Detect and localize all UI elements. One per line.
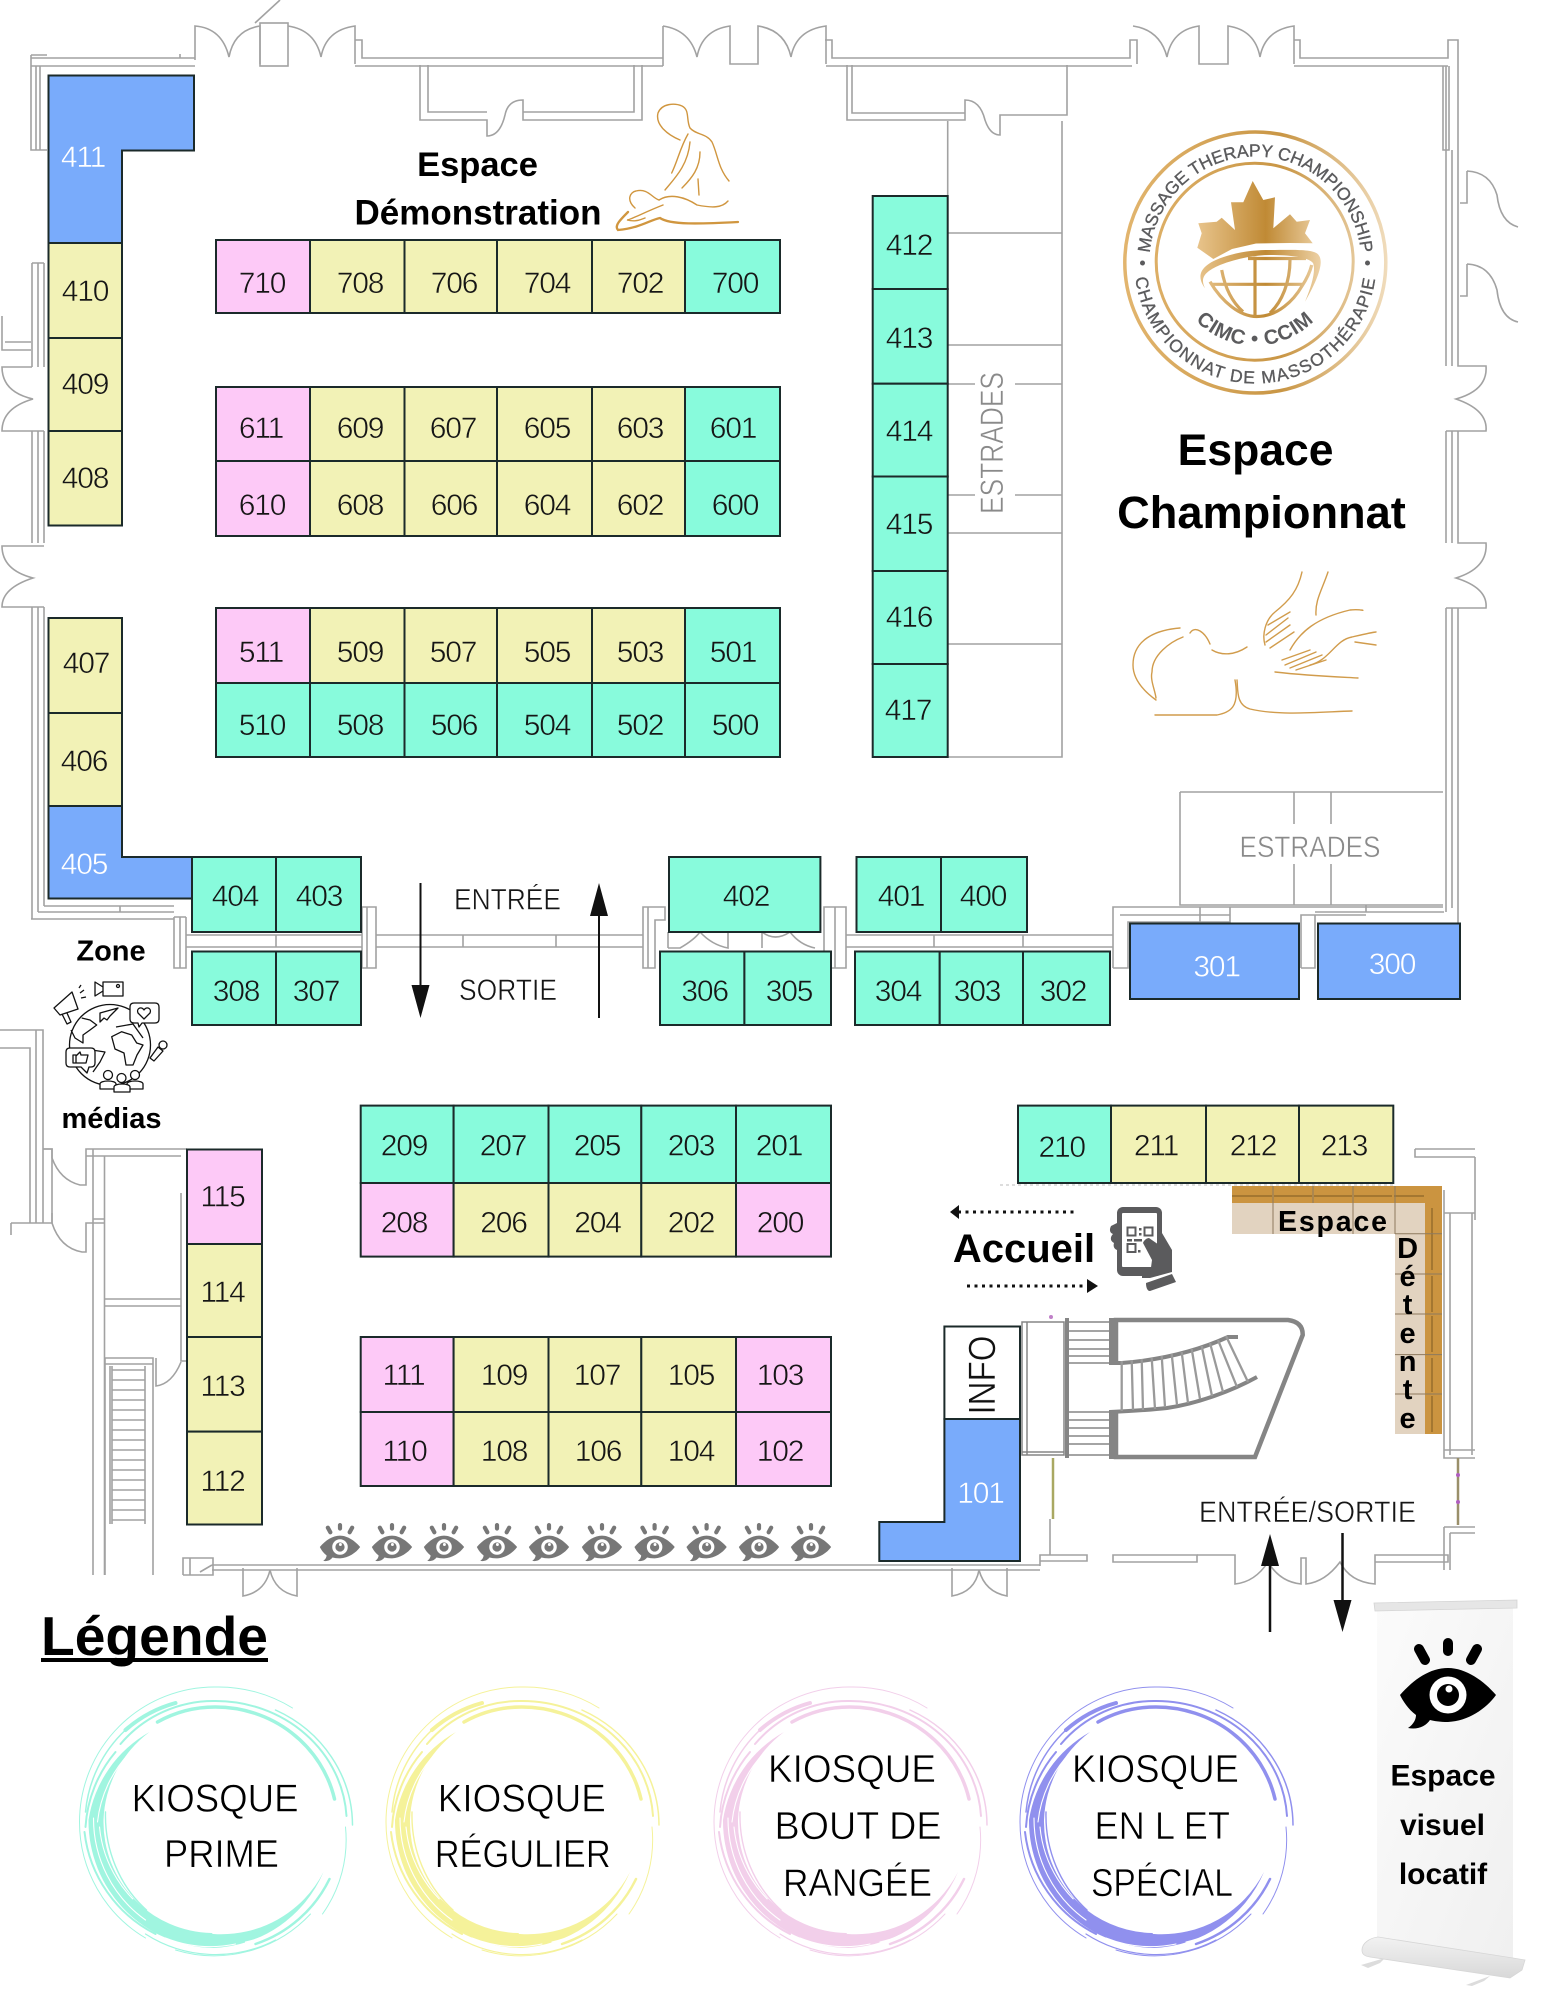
booth 212 [1206,1106,1299,1183]
booth block 200 rows [361,1106,831,1257]
heart bubble [130,1003,159,1027]
espace détente lounge: D [1397,1233,1418,1265]
booth 601: 601 [710,412,757,445]
visual rental spots row of eyes [320,1525,831,1561]
booth 710: 710 [239,267,286,300]
booth 300: 300 [1369,948,1416,981]
booth 411 [48,76,194,243]
booth block 700 row [216,240,780,313]
booth 611 [216,387,310,461]
booth 608 [310,461,404,536]
booth 503 [592,608,685,683]
roll-up banner: espace visuel locatif: visuel [1400,1809,1485,1842]
booth 208 [361,1183,454,1257]
booth 511: 511 [239,636,284,669]
heading: espace demonstration [355,146,601,232]
olive partition lines [1049,1315,1460,1525]
label: sortie: SORTIE [459,974,557,1007]
booth 213 [1299,1106,1393,1183]
booth block 500 rows [216,608,780,757]
booth 200: 200 [757,1206,804,1240]
booth 110: 110 [382,1435,427,1468]
booth 103 [736,1337,831,1412]
estrades structure right of 412-417 [948,121,1062,757]
booth 105: 105 [668,1359,715,1392]
booth 102: 102 [757,1435,804,1468]
legend: kiosque régulier [386,1687,659,1956]
booth 400 [941,857,1027,932]
booth 112: 112 [200,1465,245,1498]
eye 10 [791,1525,831,1561]
booth 504: 504 [524,709,571,742]
logo: CIMC CCIM championship seal: MASSAGE THERAPY CHAMPIONSHIP [1138,144,1372,252]
arrow: entry up [1261,1534,1279,1632]
booth 504 [497,683,592,757]
booth 405: 405 [61,848,108,881]
booth 509: 509 [337,636,384,669]
booth 203: 203 [668,1130,715,1162]
booth 507 [404,608,497,683]
eye 5 [529,1525,569,1561]
espace détente lounge: t [1403,1289,1413,1321]
booth 107: 107 [574,1359,621,1392]
booth 510: 510 [239,709,286,742]
building walls [0,0,1518,1596]
booth row 210-213 [1018,1106,1393,1183]
booth 605 [497,387,592,461]
booth 114 [187,1244,262,1337]
booth 306: 306 [681,975,728,1008]
logo: CIMC CCIM championship seal: CIMC • CCIM [1198,312,1313,344]
legend: kiosque prime [80,1687,352,1956]
booth 211 [1111,1106,1206,1183]
booth 210: 210 [1038,1131,1085,1164]
booth 407: 407 [63,647,110,680]
booth 511 [216,608,310,683]
booth column 400 left [48,76,194,898]
booth 508 [310,683,404,757]
booth 603 [592,387,685,461]
people [104,1070,112,1080]
espace détente lounge: e [1400,1318,1416,1350]
booth 412: 412 [886,229,933,262]
booth 301: 301 [1193,950,1240,984]
booth block 600 rows [216,387,780,536]
booth 702: 702 [617,267,664,300]
booth 305 [744,952,831,1025]
booth 409 [48,338,122,431]
info desk: INFO [962,1336,1004,1414]
booth 410: 410 [62,275,109,308]
booth 602: 602 [617,489,664,522]
booth 706: 706 [431,267,478,300]
booth 302 [1023,952,1110,1025]
booth 408 [48,431,122,526]
dashed reception boundary [1000,1184,1394,1186]
maple leaf [1197,181,1313,259]
booth 700: 700 [712,267,759,300]
eye 7 [634,1525,675,1561]
booth 502 [592,683,685,757]
heading: légende: Légende [41,1605,268,1667]
eye 9 [739,1525,779,1561]
booth 207 [454,1106,548,1183]
booth 407 [48,618,122,713]
booth 111: 111 [382,1359,425,1392]
icon: massage demonstration figure [617,104,738,230]
eye 6 [582,1525,622,1561]
arrow: down [412,883,430,1018]
booth 307: 307 [293,975,340,1008]
heading: espace demonstration: Espace [417,146,538,184]
legend: kiosque bout de rangée: BOUT DE [774,1805,942,1848]
logo: CIMC CCIM championship seal [1123,130,1388,395]
booth 205: 205 [574,1130,621,1162]
espace détente lounge: n [1399,1346,1416,1378]
camera [95,982,123,996]
booth 611: 611 [239,412,284,445]
booth 114: 114 [200,1276,245,1309]
legend: kiosque bout de rangée [714,1687,987,1956]
booth 708: 708 [337,267,384,300]
booth 415 [873,476,948,571]
booth column 412-417 [873,196,948,757]
booth 207: 207 [480,1130,527,1162]
booth 600 [685,461,780,536]
booth 401: 401 [878,880,925,913]
staircase [1022,1318,1303,1459]
booth 501: 501 [710,636,757,669]
microphone [150,1047,163,1061]
booth 503: 503 [617,636,664,669]
eye 1 [320,1525,360,1561]
legend: kiosque prime: KIOSQUE [132,1778,299,1821]
booth 609: 609 [337,412,384,445]
booth 106: 106 [575,1435,622,1468]
booth 417: 417 [885,694,932,727]
booth 404 [192,857,276,932]
booth 307 [276,952,361,1025]
legend: kiosque régulier: KIOSQUE [438,1778,606,1821]
booth 210 [1018,1106,1111,1183]
heading: espace demonstration: Démonstration [355,194,601,232]
eye 8 [686,1525,727,1561]
arrow: up [590,883,608,1018]
info desk [944,1326,1020,1419]
dotted arrow left [950,1205,1077,1219]
booth 414 [873,384,948,476]
booth 201: 201 [756,1130,803,1162]
booth 601 [685,387,780,461]
heading: espace championnat: Espace [1178,426,1334,475]
booth 500: 500 [712,709,759,742]
booth row 308-300 [192,924,1460,1025]
label: estrades horizontal: ESTRADES [1240,831,1380,864]
booth 204 [548,1183,641,1257]
booth 502: 502 [617,709,664,742]
booth 103: 103 [757,1359,804,1392]
booth column 112-115 [187,1150,262,1524]
booth 115 [187,1150,262,1244]
legend: kiosque en L et spécial: SPÉCIAL [1091,1862,1233,1905]
booth 300 [1318,924,1460,999]
booth 607 [404,387,497,461]
booth 401 [856,857,941,932]
roll-up banner: espace visuel locatif [1361,1600,1525,1986]
roll-up banner: espace visuel locatif: locatif [1399,1858,1488,1891]
booth 202: 202 [668,1206,715,1240]
booth 509 [310,608,404,683]
booth 408: 408 [62,462,109,495]
roll-up banner: espace visuel locatif: Espace [1390,1760,1496,1793]
booth 414: 414 [886,415,933,448]
booth 415: 415 [886,508,933,541]
entry/exit central: corridor labels and arrows [412,883,608,1018]
booth 604: 604 [524,489,571,522]
booth 413 [873,289,948,384]
booth 412 [873,196,948,289]
thumbs-up bubble [66,1048,95,1073]
booth 403: 403 [296,880,343,913]
booth 508: 508 [337,709,384,742]
globe grid [1210,257,1312,316]
espace détente lounge: t [1403,1374,1413,1406]
booth 108: 108 [481,1435,528,1468]
zone médias [54,936,167,1135]
booth 609 [310,387,404,461]
booth 605: 605 [524,412,571,445]
booth 510 [216,683,310,757]
booth 101: 101 [957,1477,1004,1510]
booth 606: 606 [431,489,478,522]
booth 406: 406 [61,745,108,778]
booth 107 [548,1337,641,1412]
booth 416 [873,571,948,664]
booth 305: 305 [766,975,813,1008]
booth 413: 413 [886,322,933,355]
booth 211: 211 [1134,1130,1179,1162]
booth 203 [641,1106,736,1183]
booth 304 [855,952,940,1025]
legend: kiosque en L et spécial: EN L ET [1094,1805,1230,1848]
zone médias: médias [62,1103,161,1135]
booth 706 [404,240,497,313]
booth 202 [641,1183,736,1257]
booth 104 [641,1412,736,1486]
logo: CIMC CCIM championship seal: CHAMPIONNAT DE MASSOTHÉRAPIE [1136,277,1376,384]
booth 209 [361,1106,454,1183]
legend: kiosque régulier: RÉGULIER [435,1833,611,1876]
accueil reception [950,1205,1176,1293]
label: estrades vertical: ESTRADES [974,372,1010,514]
megaphone [54,992,78,1024]
booth 303 [940,952,1023,1025]
booth 204: 204 [574,1206,621,1240]
label: entrée: ENTRÉE [454,884,561,917]
booth 608: 608 [337,489,384,522]
booth 306 [660,952,744,1025]
booth 702 [592,240,685,313]
booth 105 [641,1337,736,1412]
booth 113: 113 [200,1370,245,1403]
icon: media globe [54,982,167,1092]
booth 604 [497,461,592,536]
eye 4 [477,1525,517,1561]
booth 212: 212 [1230,1130,1277,1162]
espace détente lounge: é [1400,1261,1416,1293]
booth 610 [216,461,310,536]
booth 500 [685,683,780,757]
booth 710 [216,240,310,313]
booth 205 [548,1106,641,1183]
booth 610: 610 [239,489,286,522]
arrow: exit down [1334,1533,1352,1632]
booth 507: 507 [430,636,477,669]
booth 206: 206 [480,1206,527,1240]
booth 102 [736,1412,831,1486]
eye 2 [372,1525,412,1561]
booth 603: 603 [617,412,664,445]
icon: phone with QR code [1110,1207,1176,1291]
booth 302: 302 [1040,975,1087,1008]
booth 417 [873,664,948,757]
booth 104: 104 [668,1435,715,1468]
booth 115: 115 [200,1181,245,1214]
booth 606 [404,461,497,536]
booth 111 [361,1337,454,1412]
booth 704: 704 [524,267,571,300]
heading: espace championnat [1117,426,1406,538]
booth 700 [685,240,780,313]
booth 101 [879,1419,1020,1561]
booth 200 [736,1183,831,1257]
booth row 404-400 [192,857,1027,932]
booth 113 [187,1337,262,1432]
zone médias: Zone [76,936,146,968]
booth 405 [48,806,192,898]
legend: kiosque prime: PRIME [164,1833,279,1876]
booth 403 [276,857,361,932]
booth 406 [48,713,122,806]
legend: kiosque bout de rangée: RANGÉE [783,1862,932,1905]
booth 400: 400 [960,880,1007,913]
booth 201 [736,1106,831,1183]
booth 106 [548,1412,641,1486]
booth 308: 308 [213,975,260,1008]
legend: kiosque en L et spécial [1020,1687,1293,1956]
heading: espace championnat: Championnat [1117,487,1406,538]
icon: eye [1400,1643,1496,1729]
globe swoosh [1200,250,1321,302]
booth 404: 404 [212,880,259,913]
booth 410 [48,243,122,338]
booth 416: 416 [886,601,933,634]
booth 108 [454,1412,548,1486]
espace détente lounge [1232,1186,1442,1435]
eye 3 [424,1525,464,1561]
booth 110 [361,1412,454,1486]
booth 600: 600 [712,489,759,522]
booth 208: 208 [381,1206,428,1240]
booth 109 [454,1337,548,1412]
booth 402 [669,857,820,932]
booth 708 [310,240,404,313]
accueil reception: Accueil [953,1227,1095,1271]
booth 506 [404,683,497,757]
booth block 100 rows [361,1337,831,1486]
booth 602 [592,461,685,536]
booth 304: 304 [875,975,922,1008]
booth 402: 402 [723,880,770,913]
booth 505 [497,608,592,683]
booth 206 [454,1183,548,1257]
legend: kiosque bout de rangée: KIOSQUE [768,1748,936,1791]
booth 501 [685,608,780,683]
booth 505: 505 [524,636,571,669]
booth 301 [1130,924,1299,999]
booth 308 [192,952,276,1025]
booth 112 [187,1432,262,1524]
booth 411: 411 [61,141,106,174]
booth 607: 607 [430,412,477,445]
espace détente lounge: e [1400,1403,1416,1435]
booth 303: 303 [954,975,1001,1008]
icon: massage hands on back [1133,572,1376,715]
estrades structure bottom right [1180,792,1443,905]
espace détente lounge: Espace [1278,1206,1387,1238]
dotted arrow right [967,1279,1098,1293]
booth 409: 409 [62,368,109,401]
booth 506: 506 [431,709,478,742]
booth 704 [497,240,592,313]
legend: kiosque en L et spécial: KIOSQUE [1072,1748,1239,1791]
booth 213: 213 [1321,1130,1368,1162]
label: entrée/sortie: ENTRÉE/SORTIE [1199,1496,1416,1529]
booth 109: 109 [481,1359,528,1392]
booth 209: 209 [381,1130,428,1162]
